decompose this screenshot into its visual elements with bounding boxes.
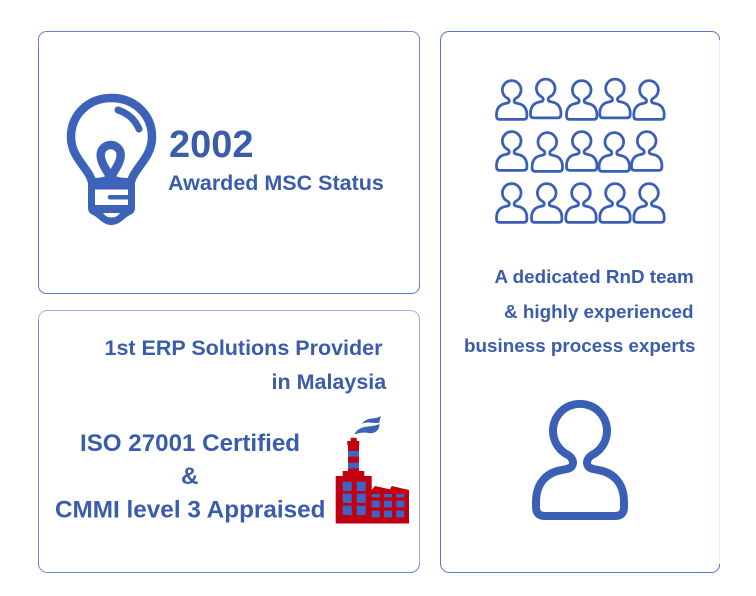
icon: light bulb: [71, 98, 152, 225]
factory building: [336, 438, 409, 524]
panel: ERP and certifications: [38, 310, 420, 572]
text: and highly experienced: & highly experienced: [504, 301, 694, 322]
text: A dedicated RnD team: A dedicated RnD team: [494, 266, 694, 287]
icon: factory: [336, 416, 409, 524]
text: CMMI level 3 Appraised: CMMI level 3 Appraised: [55, 496, 326, 524]
text: business process experts: business process experts: [464, 335, 695, 356]
icon group: team of fifteen people: [497, 79, 664, 222]
text: Awarded MSC Status: Awarded MSC Status: [168, 171, 384, 195]
text: ampersand: &: [181, 463, 198, 490]
text: ISO 27001 Certified: ISO 27001 Certified: [80, 430, 300, 457]
panel: MSC status: [38, 31, 420, 294]
icon: single person: [536, 404, 624, 516]
panel: RnD team: [440, 31, 720, 573]
heading: 2002: 2002: [169, 124, 254, 166]
text: in Malaysia: in Malaysia: [272, 370, 387, 394]
factory windows: [343, 451, 404, 517]
text: 1st ERP Solutions Provider: 1st ERP Solutions Provider: [104, 336, 383, 360]
factory smoke: [354, 416, 381, 434]
